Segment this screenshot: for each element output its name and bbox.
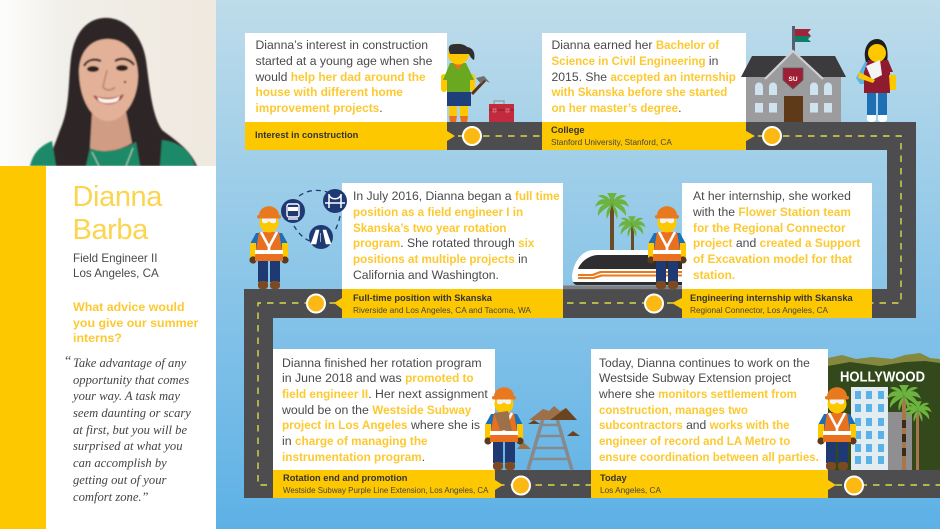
timeline markers	[307, 127, 863, 494]
icon: ladder excavation with worker	[484, 387, 580, 470]
icon: road	[309, 225, 333, 249]
card text: where she monitors settlement from	[599, 387, 797, 401]
card text: instrumentation program.	[282, 450, 425, 464]
card: engineering internship	[682, 183, 872, 289]
label bar: Regional Connector, Los Angeles, CA	[690, 306, 828, 315]
icon: train and palms with worker	[563, 193, 687, 289]
card text: for the Regional Connector	[693, 221, 846, 235]
label bar: Riverside and Los Angeles, CA and Tacoma, WA	[353, 306, 531, 315]
question heading: interns?	[73, 331, 122, 345]
label bar: Los Angeles, CA	[600, 486, 661, 495]
card text: At her internship, she worked	[693, 189, 851, 203]
card text: house with different home	[256, 85, 403, 99]
label bar: Interest in construction	[255, 130, 358, 140]
name	[72, 180, 162, 246]
quote text: seem daunting or scary	[73, 406, 191, 420]
icon: train	[281, 199, 305, 223]
Hollywood sign: HOLLYWOOD	[840, 370, 925, 386]
label bar: Westside Subway Purple Line Extension, Los Angeles, CA	[283, 486, 488, 495]
card text: In July 2016, Dianna began a full time	[353, 189, 560, 203]
icon: Hollywood skyline with worker	[817, 353, 940, 470]
question heading	[73, 300, 198, 345]
card text: in charge of managing the	[282, 434, 428, 448]
label bar	[273, 470, 495, 498]
card text: engineer of record and LA Metro to	[599, 436, 790, 448]
card text	[599, 356, 819, 464]
card: today	[591, 349, 828, 470]
pointer tabs	[334, 131, 836, 490]
label bar	[342, 289, 563, 318]
quote text	[72, 356, 191, 504]
card text: Dianna finished her rotation program	[282, 356, 482, 370]
card text: Dianna earned her Bachelor of	[552, 38, 719, 52]
photo: portrait of Dianna	[20, 0, 216, 166]
quote text: opportunity that comes	[73, 373, 189, 387]
card text: project and created a Support	[693, 236, 860, 250]
card text: program. She rotated through six	[353, 236, 534, 250]
card text: 2015. She accepted an internship	[552, 70, 736, 84]
card text: position as a field engineer I in	[353, 206, 523, 219]
card text: started at a young age when she	[256, 54, 432, 68]
card text: Westside Subway Extension project	[599, 371, 791, 385]
card text: construction, manages two	[599, 405, 748, 417]
panel: sky background	[216, 0, 940, 529]
question heading: What advice would	[73, 300, 185, 314]
icon: bridge	[323, 189, 347, 213]
label bar: Full-time position with Skanska	[353, 293, 492, 303]
dashed ring linking icons	[294, 190, 340, 241]
card text: station.	[693, 268, 735, 282]
card text: subcontractors and works with the	[599, 418, 790, 432]
question heading: you give our summer	[73, 316, 198, 330]
card text: Dianna’s interest in construction	[256, 38, 428, 52]
label bar	[682, 289, 872, 318]
icon: girl with hammer and toolbox	[441, 44, 514, 122]
opening quote mark: “	[65, 354, 71, 369]
card text: on her master’s degree.	[552, 101, 681, 115]
card text: in June 2018 and was promoted to	[282, 371, 474, 385]
quote text: Take advantage of any	[73, 356, 186, 370]
label bar: College	[551, 125, 585, 135]
name: Barba	[72, 214, 148, 246]
job title and location	[73, 252, 159, 280]
card text	[552, 38, 736, 115]
icon: university building: SU	[788, 76, 798, 83]
quote text: getting out of your	[73, 473, 166, 487]
job title and location: Los Angeles, CA	[73, 267, 159, 280]
card text: field engineer II. Her next assignment	[282, 387, 488, 401]
card text: positions at multiple projects in	[353, 252, 528, 266]
label bar	[591, 470, 828, 498]
card text: California and Washington.	[353, 268, 499, 282]
card text: Skanska’s two year rotation	[353, 222, 507, 235]
card: college	[542, 33, 746, 122]
icon: worker with project icons	[249, 189, 347, 289]
quote text: surprised at what you	[73, 439, 183, 453]
label bar: Engineering internship with Skanska	[690, 293, 853, 303]
card text: project in Los Angeles where she is	[282, 418, 480, 432]
quote text: comfort zone.”	[73, 490, 149, 504]
card text: Science in Civil Engineering in	[552, 54, 718, 68]
card text: would help her dad around the	[256, 70, 426, 84]
quote text: can accomplish by	[73, 456, 167, 470]
card text: would be on the Westside Subway	[282, 403, 471, 417]
card text: of Excavation model for that	[693, 252, 852, 266]
card text	[693, 189, 860, 282]
icon: university building	[741, 26, 846, 122]
label bar	[245, 122, 447, 150]
card text: with Skanska before she started	[552, 87, 727, 99]
card text: ensure coordination between all parties.	[599, 452, 819, 464]
label bar: Rotation end and promotion	[283, 473, 407, 483]
card text: with the Flower Station team	[693, 205, 851, 219]
panel: profile sidebar	[0, 0, 216, 529]
card: full-time position	[342, 183, 563, 289]
card: rotation end and promotion	[273, 349, 495, 470]
quote text: your way. A task may	[73, 389, 180, 403]
quote text: at first, but you will be	[73, 423, 187, 437]
label bar: Today	[600, 473, 627, 483]
card text: improvement projects.	[256, 101, 383, 115]
card text	[353, 189, 560, 282]
label bar: Stanford University, Stanford, CA	[551, 138, 672, 147]
label bar	[542, 122, 746, 150]
icon: student with books	[856, 39, 896, 122]
icon: toolbox	[489, 101, 514, 122]
card text	[282, 356, 488, 464]
card text	[256, 38, 432, 115]
card text: Today, Dianna continues to work on the	[599, 356, 810, 370]
name: Dianna	[72, 180, 162, 212]
sidebar yellow strip	[0, 166, 46, 529]
card: interest in construction	[245, 33, 447, 122]
job title and location: Field Engineer II	[73, 252, 157, 264]
